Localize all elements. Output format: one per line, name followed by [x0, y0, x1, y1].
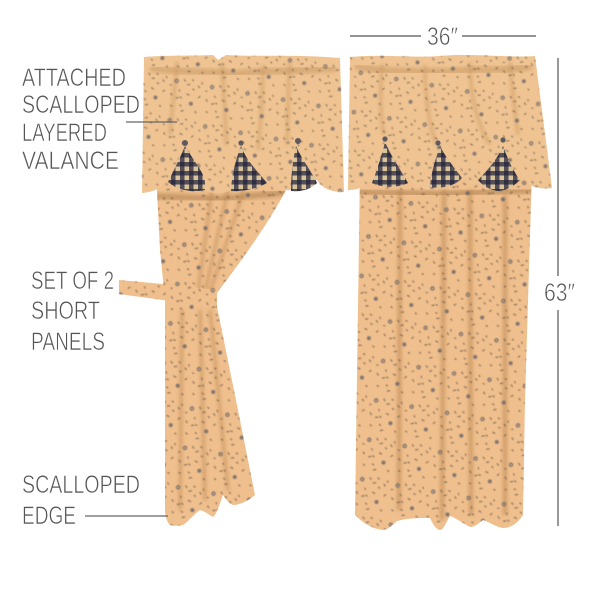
right drape — [355, 178, 532, 530]
label: set of 2 short panels: SET OF 2 — [31, 267, 114, 295]
gingham inset 1 — [372, 142, 408, 187]
height dimension: 63 inches: 63″ — [544, 279, 575, 307]
label: set of 2 short panels: PANELS — [31, 328, 105, 356]
label: attached scalloped layered valance: SCALLOPED — [22, 91, 140, 119]
button 2 — [238, 140, 244, 146]
label: attached scalloped layered valance: LAYERED — [22, 119, 107, 147]
button 2 — [435, 140, 441, 146]
gingham inset 3 — [478, 146, 520, 191]
gingham inset 2 — [430, 146, 462, 188]
label: scalloped edge: EDGE — [22, 502, 76, 530]
button 3 — [500, 137, 506, 143]
gingham inset 2 — [231, 146, 267, 191]
tieback — [119, 280, 217, 305]
button 1 — [382, 136, 388, 142]
label: attached scalloped layered valance: VALANCE — [22, 147, 119, 175]
leader line: valance — [126, 121, 177, 123]
left drape — [157, 180, 286, 526]
label: attached scalloped layered valance: ATTACHED — [22, 64, 126, 92]
right curtain panel — [348, 55, 552, 535]
leader line: scalloped edge — [85, 515, 168, 517]
label: set of 2 short panels: SHORT — [31, 297, 100, 325]
left valance — [142, 55, 344, 193]
infographic canvas — [22, 27, 574, 530]
label: scalloped edge: SCALLOPED — [22, 471, 140, 499]
label: scalloped edge — [22, 471, 140, 530]
right valance — [348, 55, 552, 191]
left curtain panel — [119, 55, 344, 530]
button 1 — [182, 140, 188, 146]
label: attached scalloped layered valance — [22, 64, 140, 175]
gingham inset 1 — [168, 146, 205, 191]
width dimension: 36 inches: 36″ — [427, 23, 458, 51]
label: set of 2 short panels — [31, 267, 114, 356]
gingham inset 3 — [291, 146, 317, 191]
button 3 — [295, 138, 301, 144]
